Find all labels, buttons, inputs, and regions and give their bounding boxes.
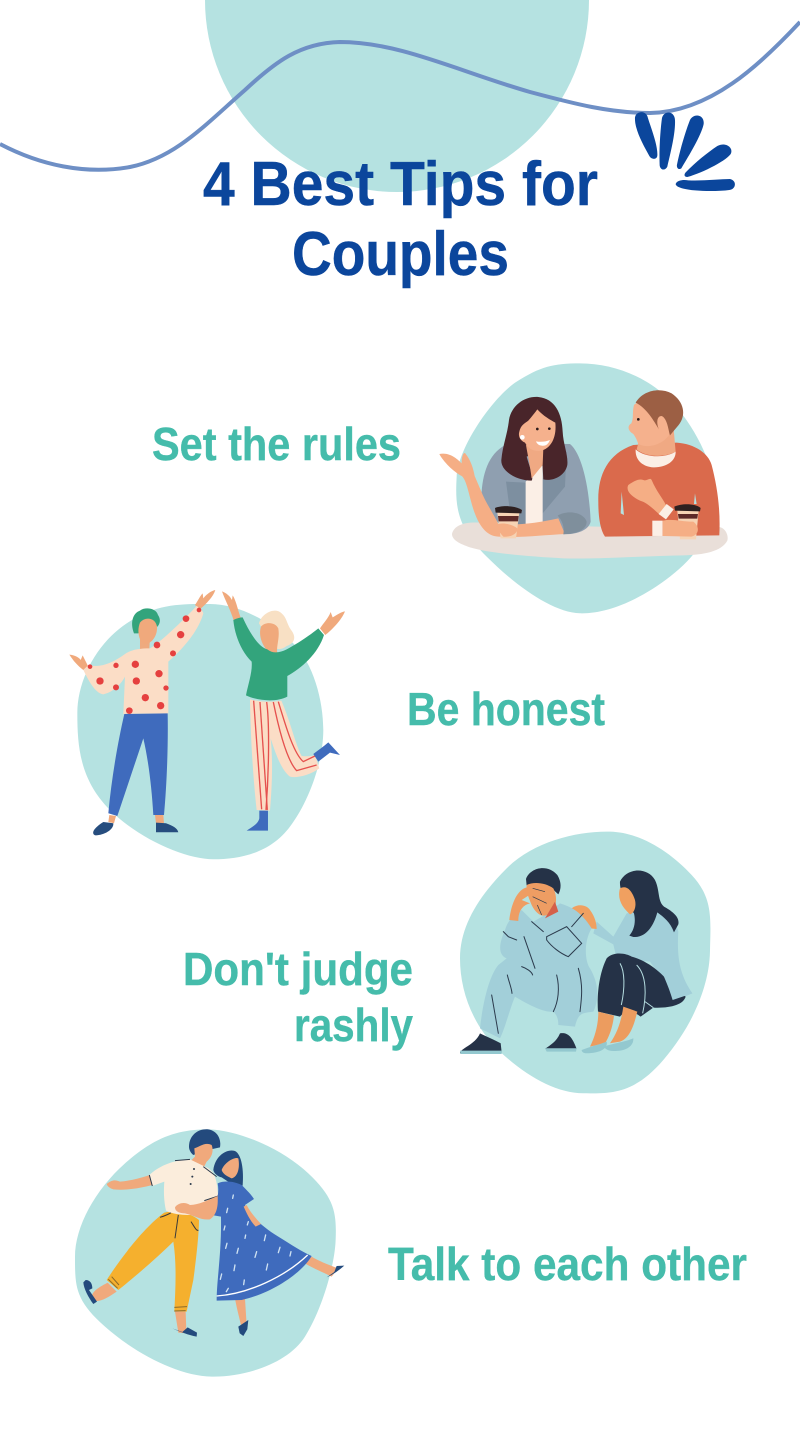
- table: [452, 522, 728, 558]
- woman jacket: [482, 443, 591, 534]
- man shoes: [93, 822, 113, 835]
- man trousers: [107, 1211, 199, 1312]
- heading: don't judge rashly: Don't judge: [183, 943, 413, 995]
- woman legs: [235, 1298, 247, 1328]
- man arm embracing: [175, 1196, 218, 1220]
- man collar: [636, 449, 676, 467]
- woman socks and shoes: [247, 811, 268, 831]
- blob background: [456, 363, 716, 613]
- woman cup: [497, 513, 519, 538]
- title: [203, 150, 598, 289]
- woman sandals: [238, 1320, 248, 1336]
- woman jacket tail: [657, 960, 692, 1000]
- man creases: [492, 913, 583, 1033]
- man legs: [92, 1283, 117, 1301]
- woman neck and face: [260, 623, 279, 653]
- woman dress: [212, 1182, 312, 1301]
- man face and hand: [527, 883, 556, 916]
- heading: talk to each other: Talk to each other: [388, 1238, 747, 1290]
- illustration: comforting a sad partner: [460, 832, 710, 1093]
- heading: don't judge rashly: [183, 943, 413, 1051]
- blob background: [460, 832, 710, 1093]
- man ankles: [108, 815, 164, 823]
- illustration: couple at table with coffee: [439, 363, 728, 613]
- woman jacket: [593, 908, 692, 1000]
- man head and neck: [190, 1144, 213, 1168]
- woman trousers: [250, 699, 319, 811]
- icon: sunburst dashes: [635, 112, 735, 191]
- woman shoes: [582, 1042, 607, 1053]
- heading: don't judge rashly: rashly: [294, 999, 413, 1051]
- man hair: [189, 1129, 220, 1155]
- man hair: [526, 868, 561, 894]
- man trousers: [108, 713, 168, 816]
- man hair: [132, 608, 160, 633]
- man neck: [140, 637, 150, 650]
- man clothes: [480, 903, 597, 1038]
- man hand right: [195, 590, 215, 609]
- illustration: two people dancing with raised arms: [69, 590, 345, 859]
- man hand left: [69, 655, 88, 670]
- woman face: [519, 409, 556, 451]
- woman legs: [590, 1012, 614, 1047]
- woman face: [619, 887, 635, 914]
- woman hair: [620, 871, 679, 937]
- man sweater: [83, 606, 203, 714]
- title: Couples: [292, 220, 509, 289]
- wavy line: [0, 22, 800, 170]
- man head: [629, 399, 673, 446]
- man face: [138, 619, 157, 644]
- woman shirt: [526, 465, 543, 524]
- man sweater: [598, 443, 720, 537]
- woman hair: [501, 397, 567, 481]
- illustration: couple dancing together: [75, 1129, 344, 1377]
- man shoes: [460, 1033, 502, 1053]
- woman hair: [259, 611, 294, 649]
- woman hair: [213, 1150, 243, 1186]
- woman sweater: [233, 617, 324, 700]
- man hair: [636, 390, 683, 435]
- woman hand: [572, 905, 597, 929]
- man hand and arm: [628, 479, 666, 515]
- woman neck: [526, 445, 543, 478]
- polka dots: [88, 608, 201, 714]
- woman cuff: [558, 512, 587, 534]
- trouser stripes: [254, 701, 317, 810]
- woman face: [222, 1158, 239, 1178]
- woman trousers: [598, 953, 686, 1017]
- title: 4 Best Tips for: [203, 150, 598, 219]
- heading: be honest: Be honest: [407, 683, 605, 735]
- top decorative circle: [205, 0, 589, 192]
- man shirt: [149, 1159, 218, 1215]
- heading: set the rules: Set the rules: [152, 418, 401, 470]
- man neck: [637, 425, 676, 456]
- woman hands: [222, 591, 241, 621]
- man arm left: [107, 1175, 152, 1190]
- man cup: [677, 511, 699, 539]
- blob background: [75, 1129, 336, 1377]
- blob background: [77, 604, 323, 859]
- woman arm: [439, 453, 565, 537]
- man sandals: [83, 1280, 97, 1304]
- woman arm: [244, 1205, 261, 1227]
